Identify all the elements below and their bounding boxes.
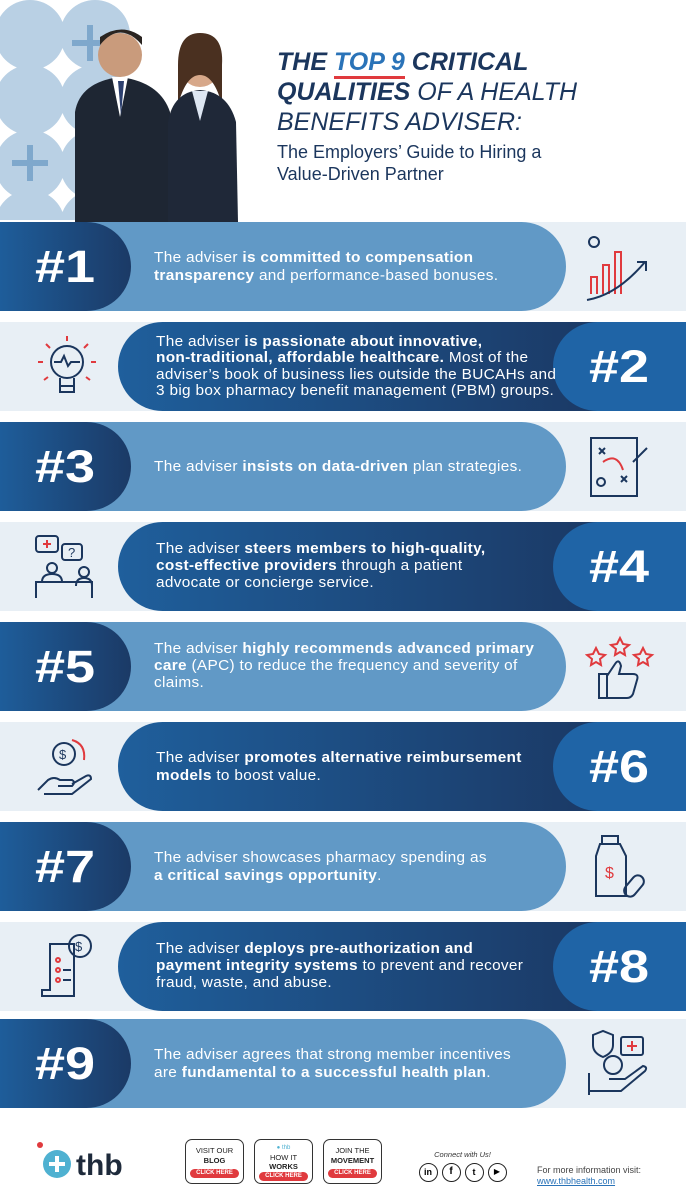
row 4: The adviser steers members to high-quality,: [156, 541, 485, 557]
row 3: [0, 422, 686, 511]
footer: thb logo: [37, 1142, 123, 1180]
photo: two advisers: [75, 30, 238, 222]
row 1: The adviser is committed to compensation: [154, 250, 473, 266]
button: how it works: [254, 1139, 313, 1184]
social icons: [419, 1150, 507, 1182]
title block: BENEFITS ADVISER:: [277, 108, 522, 136]
row 6: #6: [589, 740, 650, 792]
icon: consultation: ?: [68, 545, 75, 560]
button: movement: CLICK HERE: [334, 1170, 371, 1176]
row 5: care (APC) to reduce the frequency and severity of: [154, 658, 518, 674]
row 8: [0, 922, 686, 1011]
row 2: adviser’s book of business lies outside the BUCAHs and: [156, 366, 556, 382]
icon: pill bottle: [595, 835, 645, 898]
social icons: in: [424, 1167, 432, 1177]
button: how it works: WORKS: [269, 1162, 298, 1171]
button: how it works: ● thb: [277, 1145, 290, 1151]
row 6: models to boost value.: [156, 768, 321, 784]
title block: [277, 48, 578, 184]
row 4: #4: [589, 540, 650, 592]
row 7: #7: [35, 840, 96, 892]
row 2: #2: [589, 340, 650, 392]
row 9: are fundamental to a successful health plan.: [154, 1064, 491, 1080]
social icons: f: [449, 1166, 453, 1177]
icon: thumbs up stars: [585, 636, 654, 699]
row 4: cost-effective providers through a patient: [156, 558, 462, 574]
row 9: The adviser agrees that strong member incentives: [154, 1046, 511, 1062]
button: blog: CLICK HERE: [196, 1170, 233, 1176]
icon: hand with coin: [37, 739, 92, 795]
row 8: #8: [589, 940, 650, 992]
row 3: #3: [35, 440, 96, 492]
row 7: a critical savings opportunity.: [154, 868, 382, 884]
icon: pill bottle: $: [605, 865, 614, 882]
row 4: advocate or concierge service.: [156, 575, 374, 591]
button: how it works: HOW IT: [270, 1153, 297, 1162]
row 9: #9: [35, 1038, 96, 1088]
social icons: ▶: [494, 1167, 500, 1176]
icon: lightbulb heart: [38, 336, 96, 393]
title block: THE TOP 9 CRITICAL: [277, 48, 528, 76]
row 1: #1: [35, 240, 96, 292]
title block: QUALITIES OF A HEALTH: [277, 78, 577, 106]
title block: Value-Driven Partner: [277, 164, 444, 184]
more info: [537, 1165, 641, 1186]
social icons: t: [472, 1167, 476, 1177]
row 5: #5: [35, 640, 96, 692]
row 8: payment integrity systems to prevent and recover: [156, 958, 523, 974]
button: blog: [185, 1139, 244, 1184]
icon: invoice with dollar: [41, 934, 92, 997]
row 4: [0, 522, 686, 611]
row 9: [0, 1019, 686, 1108]
row 1: [0, 222, 686, 311]
footer buttons: [185, 1139, 382, 1184]
row 7: The adviser showcases pharmacy spending as: [154, 850, 487, 866]
row 8: fraud, waste, and abuse.: [156, 975, 332, 991]
button: movement: MOVEMENT: [331, 1156, 374, 1165]
title block: The Employers’ Guide to Hiring a: [277, 142, 541, 162]
more info: For more information visit:: [537, 1165, 641, 1175]
button: how it works: CLICK HERE: [265, 1173, 302, 1179]
row 6: The adviser promotes alternative reimbursement: [156, 750, 522, 766]
row 5: The adviser highly recommends advanced primary: [154, 641, 534, 657]
icon: invoice with dollar: $: [75, 939, 83, 954]
icon: hand with shield and kit: [588, 1030, 648, 1095]
icon: strategy board: [590, 437, 648, 497]
row 5: [0, 622, 686, 711]
icon: hand with coin: $: [59, 747, 67, 762]
row 2: The adviser is passionate about innovative,: [156, 334, 482, 350]
button: blog: VISIT OUR: [196, 1146, 233, 1155]
row 2: 3 big box pharmacy benefit management (PBM) groups.: [156, 383, 554, 399]
row 7: [0, 822, 686, 911]
button: blog: BLOG: [204, 1156, 225, 1165]
header decoration: circles: [0, 0, 130, 220]
icon: consultation: [35, 535, 93, 598]
button: movement: JOIN THE: [335, 1146, 370, 1155]
row 2: non-traditional, affordable healthcare. Most of the: [156, 350, 528, 366]
row 1: transparency and performance-based bonuses.: [154, 268, 498, 284]
icon: chart with arrow: [586, 236, 647, 301]
row 8: The adviser deploys pre-authorization and: [156, 941, 473, 957]
more info: www.thbhealth.com: [537, 1176, 615, 1186]
row 5: claims.: [154, 675, 204, 691]
button: movement: [323, 1139, 382, 1184]
row 6: [0, 722, 686, 811]
row 3: The adviser insists on data-driven plan strategies.: [154, 458, 522, 474]
row 2: [0, 322, 686, 411]
social icons: Connect with Us!: [434, 1150, 491, 1159]
